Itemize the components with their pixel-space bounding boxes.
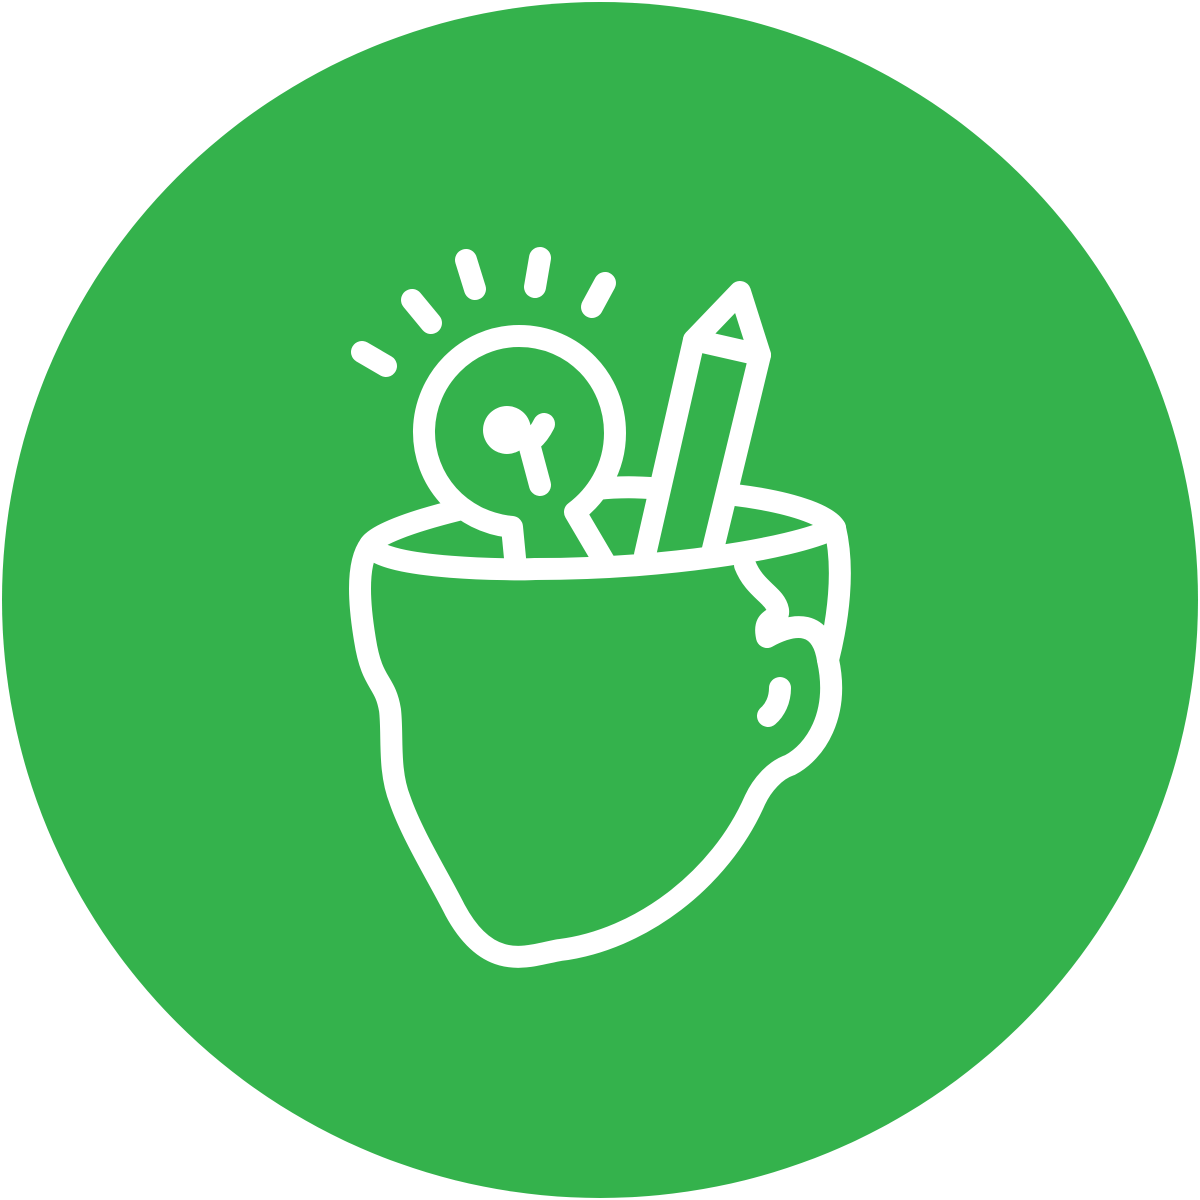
pencil [645,292,760,555]
head rim back right [735,495,835,528]
rays [362,258,605,366]
pencil holder line [598,487,650,489]
head rim front [370,528,835,569]
lightbulb [424,336,615,563]
ear [745,565,828,660]
line art [360,258,840,957]
head outline [360,528,840,957]
filament [483,406,531,454]
head rim back left [370,510,458,545]
